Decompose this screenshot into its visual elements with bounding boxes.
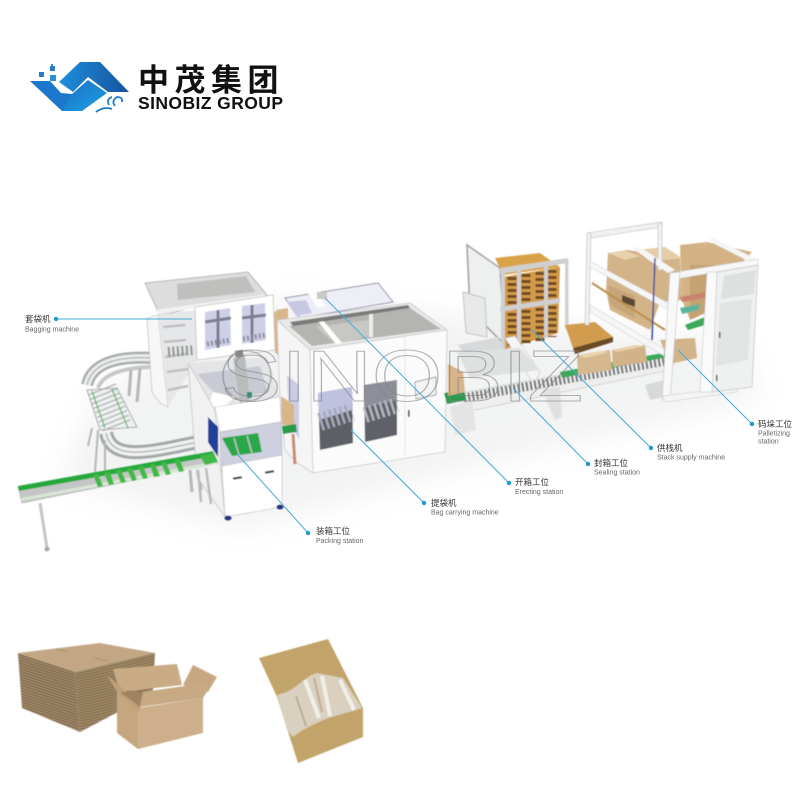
callout: bagging machine: 套袋机: [25, 314, 51, 324]
kraft window bag photo: [259, 639, 363, 763]
palletizing station: [585, 222, 760, 402]
callout: bagging machine: [25, 314, 192, 334]
back erecting cell: [276, 283, 393, 345]
callout: packing station: Packing station: [316, 538, 364, 545]
callout: palletizing station: Palletizing: [758, 430, 790, 438]
callout: bag carrying machine: Bag carrying machine: [431, 510, 499, 516]
floor shadows: [60, 300, 760, 530]
callout: erecting station: 开箱工位: [515, 477, 550, 487]
watermark: SINOBIZ: [221, 337, 583, 417]
cardboard boxes photo: [18, 643, 217, 749]
callout: stack supply machine: 供栈机: [657, 443, 683, 453]
callout: packing station: [238, 455, 364, 545]
callout: palletizing station: [678, 350, 793, 446]
callout: palletizing station: station: [758, 438, 779, 446]
callout: sealing station: Sealing station: [594, 470, 640, 476]
callout: bag carrying machine: [351, 430, 499, 516]
open carton: [107, 664, 217, 749]
callout: bag carrying machine: 提袋机: [431, 498, 457, 508]
callout: bagging machine: Bagging machine: [25, 326, 79, 334]
curved roller conveyor: [87, 358, 201, 492]
callout: sealing station: 封箱工位: [594, 458, 629, 468]
sealing roller conveyor: [444, 352, 670, 435]
bag carrying machine: [277, 303, 447, 473]
bagging machine: [145, 272, 282, 407]
logo english name: SINOBIZ GROUP: [138, 93, 283, 113]
callout: palletizing station: 码垛工位: [758, 419, 793, 429]
production line machinery: [18, 222, 760, 552]
callout: sealing station: [513, 388, 640, 476]
packing station: [188, 350, 284, 520]
callout: erecting station: [325, 298, 563, 496]
callout: stack supply machine: [532, 330, 725, 462]
callout: packing station: 装箱工位: [316, 526, 351, 536]
wood pallet on conveyor: [565, 322, 613, 354]
green belt conveyor: [18, 451, 218, 552]
stacked cartons: [606, 242, 752, 330]
logo: [30, 55, 284, 113]
flat carton stack: [18, 643, 155, 732]
logo chinese name: 中茂集团: [138, 55, 284, 100]
pallet supply machine: [457, 245, 568, 385]
icon: logo mark: [30, 62, 129, 112]
callout: erecting station: Erecting station: [515, 489, 563, 496]
cartons on conveyor: [577, 338, 697, 375]
callout: stack supply machine: Stack supply machine: [657, 454, 725, 462]
